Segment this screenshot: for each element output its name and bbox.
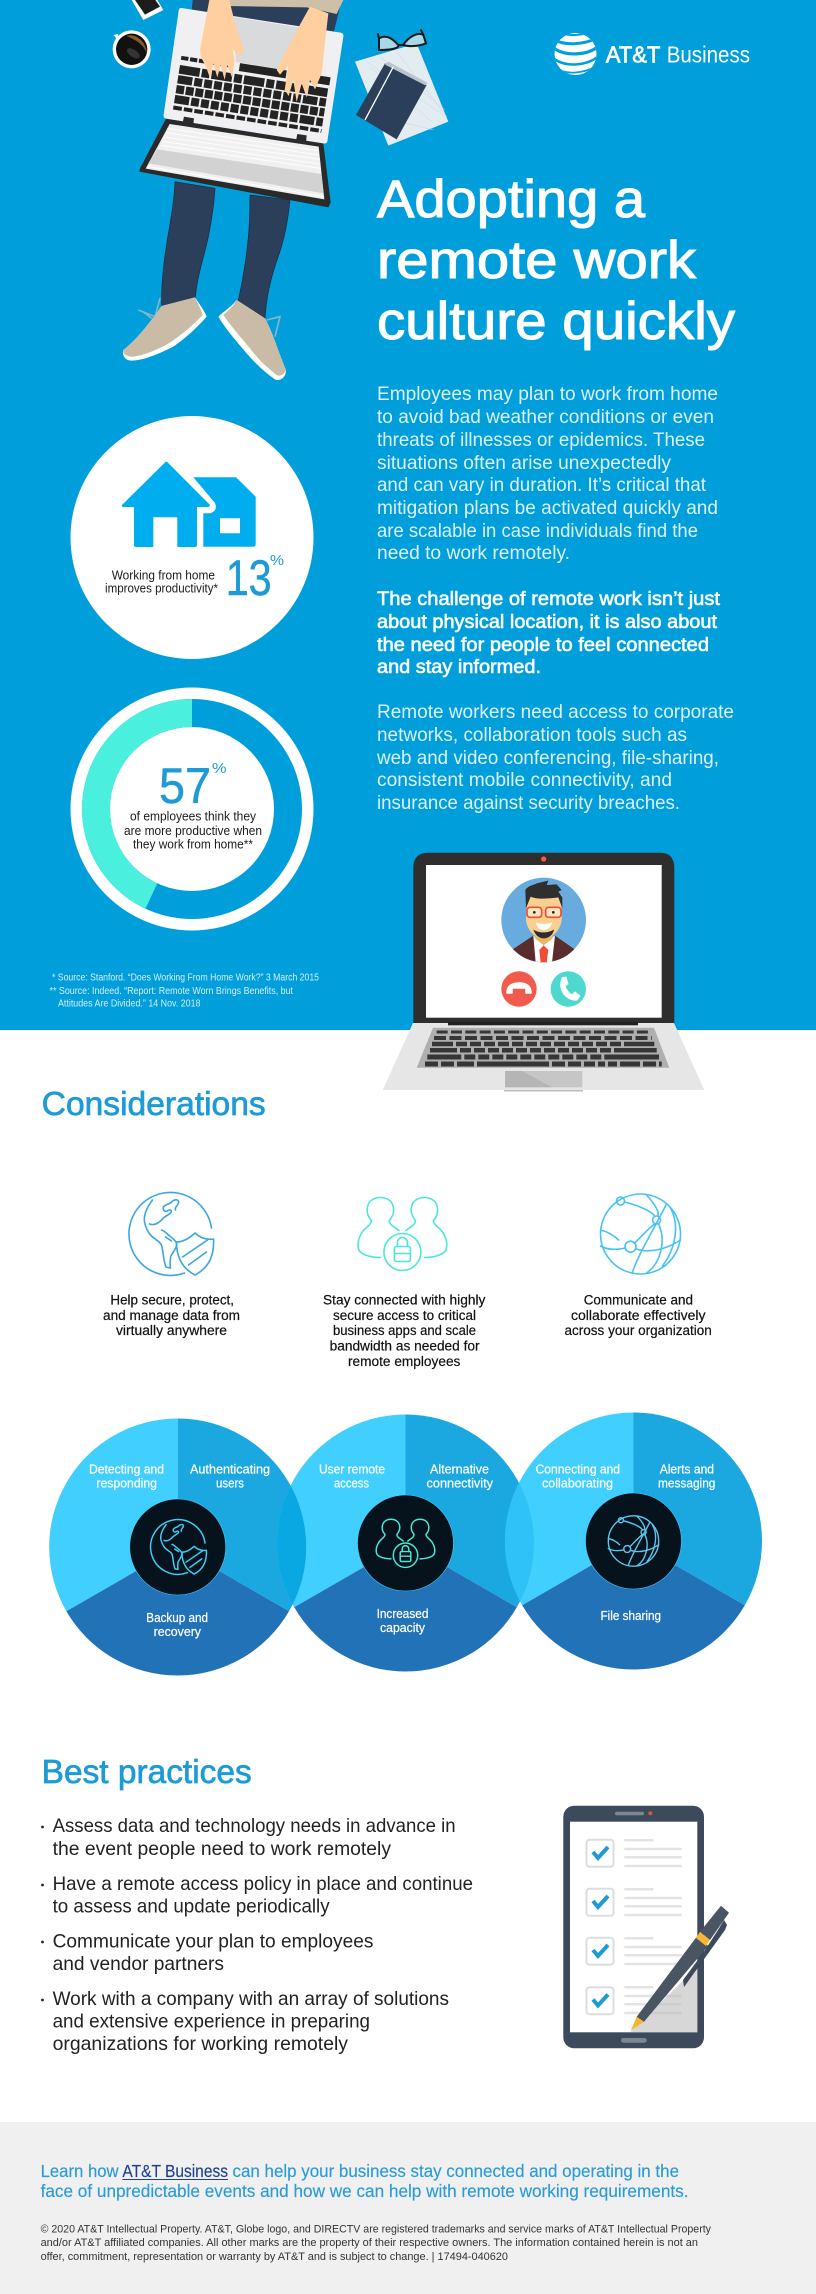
title [377,170,736,351]
checklist [586,1840,682,2014]
segment labels circle 3 [536,1462,715,1623]
text block: remote workers paragraph: Remote workers need access to corporate [377,701,734,723]
text block: intro paragraph: and can vary in duration. It’s critical that [377,474,707,496]
bullet list: best practices: and extensive experience in preparing [53,2010,370,2032]
illustration: laptop with video call [383,853,704,1092]
call to action: can help your business stay connected and operating in the [232,2161,679,2181]
text block: bold challenge statement: The challenge of remote work isn’t just [377,588,721,610]
segment labels circle 2 [319,1462,494,1635]
text block: intro paragraph: situations often arise unexpectedly [377,452,671,474]
caption: Help secure, protect, [110,1292,234,1307]
text block: intro paragraph: threats of illnesses or epidemics. These [377,429,705,451]
bullet list: best practices: the event people need to work remotely [53,1838,391,1860]
panel: 57% donut chart stat [70,688,314,930]
venn diagram: three segmented circles [49,1412,762,1676]
segment labels circle 1: Detecting and [89,1462,164,1476]
call to action: face of unpredictable events and how we can help with remote working requirements. [41,2181,689,2201]
caption: collaborate effectively [571,1308,706,1323]
text block: bold challenge statement: about physical location, it is also about [377,611,718,633]
stat label: they work from home** [133,836,253,852]
legal fine print: offer, commitment, representation or warranty by AT&T and is subject to change. | 17494-040620 [41,2251,508,2263]
center badge 1 [130,1499,226,1595]
illustration: phone checklist with pen [563,1806,729,2048]
icon: AT&T globe [554,33,596,75]
laptop base [383,1023,704,1090]
bullet list: best practices: Assess data and technology needs in advance in [53,1815,456,1837]
text block: intro paragraph: mitigation plans be activated quickly and [377,497,718,519]
laptop lid [139,119,331,207]
icon: notepad, notebook and glasses [355,29,448,146]
text block: remote workers paragraph: insurance against security breaches. [377,792,680,814]
illustration: person working on a laptop from above [113,0,448,380]
stat number: % [212,760,226,777]
call to action: AT&T Business [122,2161,228,2181]
caption: Stay connected with highly [323,1292,486,1307]
legal fine print: and/or AT&T affiliated companies. All other marks are the property of their respective owners. The information contained herein is not an [41,2237,698,2249]
caption: secure access to critical [333,1308,476,1323]
text block: intro paragraph: to avoid bad weather conditions or even [377,406,714,428]
segment labels circle 1: Authenticating [190,1462,270,1476]
stat number: 13 [226,550,272,606]
call to action: Learn how [41,2161,119,2181]
legal fine print [41,2224,711,2263]
segment labels circle 2: capacity [380,1621,426,1635]
call to action [41,2161,689,2201]
laptop screen [426,865,662,1018]
bullet list: best practices [41,1815,473,2055]
heading: Considerations: Considerations [42,1085,266,1122]
text block: intro paragraph: are scalable in case individuals find the [377,520,698,542]
AT&T Business logo [552,31,750,75]
segment labels circle 2: access [334,1477,369,1491]
bullet list: best practices: Have a remote access policy in place and continue [53,1873,473,1895]
icon: phone on floor [132,0,163,20]
footer panel [0,2122,816,2294]
segment labels circle 3: Alerts and [660,1462,714,1476]
torso and shirt [192,0,343,32]
donut ring [82,699,302,919]
icon: globe with shield [129,1192,214,1275]
heading: Best practices: Best practices [42,1753,252,1790]
center badge 3 [586,1493,682,1589]
segment labels circle 1: users [216,1477,244,1491]
text block: bold challenge statement: and stay informed. [377,656,541,678]
logo wordmark: Business [667,42,750,68]
text block: bold challenge statement [377,588,721,678]
caller avatar [501,878,586,963]
segment labels circle 1: responding [96,1477,157,1491]
logo wordmark [606,42,750,68]
keyboard [417,1028,669,1068]
text block: remote workers paragraph: networks, collaboration tools such as [377,724,687,746]
legal fine print: © 2020 AT&T Intellectual Property. AT&T, Globe logo, and DIRECTV are registered trademarks and service marks of AT&T Intellectual Property [41,2224,711,2236]
text block: remote workers paragraph: web and video conferencing, file-sharing, [376,747,719,769]
icon: accept call [551,971,586,1007]
caption: across your organization [564,1323,712,1338]
segment labels circle 3: messaging [658,1477,715,1491]
segment labels circle 3: collaborating [542,1477,613,1491]
segment labels circle 2: connectivity [426,1477,494,1491]
overlap lens 1 [277,1486,306,1604]
stat label: improves productivity* [105,581,218,596]
laptop base with keyboard [164,8,343,143]
panel: 13% productivity stat [70,416,314,659]
bullet list: best practices: to assess and update periodically [53,1896,330,1918]
hands [200,0,328,102]
title: Adopting a [377,170,646,229]
bullet list: best practices: and vendor partners [53,1953,224,1975]
segment labels circle 1: Backup and [146,1611,208,1625]
segment labels circle 2: Alternative [430,1462,489,1476]
stat label: Working from home [112,567,215,582]
legs [162,182,290,318]
caption: and manage data from [103,1308,240,1323]
caption: bandwidth as needed for [330,1338,480,1354]
caption: business apps and scale [333,1323,476,1338]
segment labels circle 3: File sharing [600,1609,661,1623]
center badge 2 [358,1495,454,1591]
title: remote work [377,231,697,290]
bullet list: best practices: Work with a company with an array of solutions [53,1988,449,2010]
segment labels circle 1: recovery [154,1625,202,1639]
hero background panel [0,0,816,1030]
caption [564,1292,712,1338]
segmented circle 3 [505,1412,762,1670]
stat number: 57 [159,758,211,814]
trackpad [504,1071,583,1092]
segmented circle 2 [277,1414,534,1672]
segment labels circle 1 [89,1462,270,1639]
caption: virtually anywhere [116,1323,227,1338]
stat label: of employees think they [130,809,256,824]
pen shadow [630,1967,697,2032]
icon: users with lock [358,1198,447,1270]
icon: coffee cup [113,30,151,68]
caption: Communicate and [584,1292,693,1307]
overlap lens 2 [505,1483,534,1600]
icon: decline call [501,971,537,1007]
stat label [105,567,218,596]
segment labels circle 3: Connecting and [536,1462,620,1476]
text block: intro paragraph: Employees may plan to work from home [377,383,718,405]
icon: network globe [600,1194,680,1274]
bullet list: best practices: organizations for working remotely [53,2033,348,2055]
text block: remote workers paragraph: consistent mobile connectivity, and [377,769,672,791]
source footnotes [50,973,319,1010]
source footnotes: * Source: Stanford. “Does Working From Home Work?” 3 March 2015 [52,973,319,984]
icon: houses [122,462,256,547]
stat label: are more productive when [124,823,262,838]
shoes [123,297,286,380]
text block: intro paragraph [377,383,718,564]
bullet list: best practices: Communicate your plan to employees [53,1930,374,1952]
title: culture quickly [377,292,736,351]
text block: remote workers paragraph [376,701,734,814]
stat number: % [270,552,284,569]
consideration: secure and protect [103,1192,240,1338]
segment labels circle 2: User remote [319,1462,385,1476]
source footnotes: Attitudes Are Divided.” 14 Nov. 2018 [58,999,201,1010]
source footnotes: ** Source: Indeed. “Report: Remote Worn Brings Benefits, but [50,986,293,997]
phone body [563,1806,704,2048]
consideration: stay connected [323,1198,486,1369]
caption [323,1292,486,1369]
logo wordmark: AT&T [606,42,660,68]
pen [631,1906,729,2031]
consideration: communicate and collaborate [564,1194,712,1338]
text block: intro paragraph: need to work remotely. [377,542,570,564]
stat label [124,809,262,852]
segmented circle 1 [49,1418,306,1676]
caption: remote employees [348,1354,461,1369]
laptop lid [413,853,674,1024]
caption [103,1292,240,1338]
text block: bold challenge statement: the need for people to feel connected [377,634,709,656]
segment labels circle 2: Increased [377,1607,428,1621]
